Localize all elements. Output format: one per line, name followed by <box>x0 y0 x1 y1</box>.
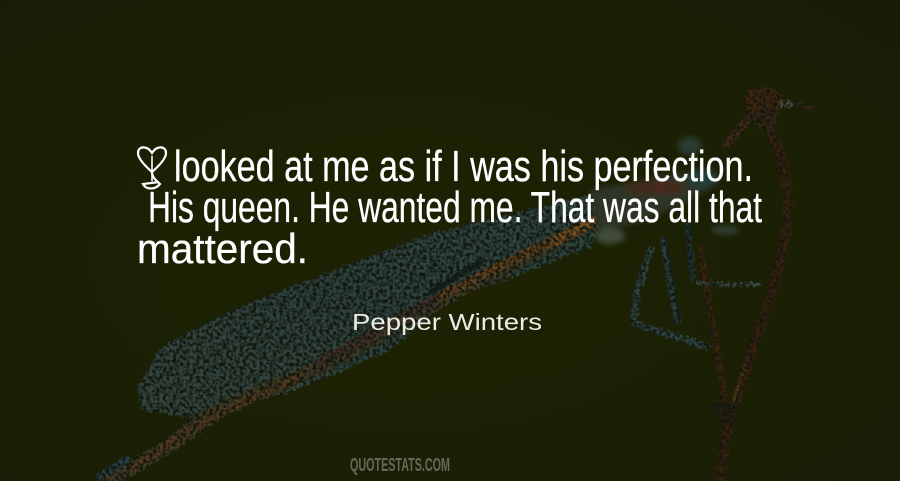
photo: dragonfly on a twig <box>100 87 813 481</box>
heart-shaped letter I <box>138 147 166 189</box>
words of line 1: looked at me as if I was his perfection. <box>174 142 753 191</box>
twig bud <box>742 87 794 130</box>
heart-shaped letter I: I <box>150 148 154 189</box>
wing <box>137 192 610 417</box>
watermark: QUOTESTATS.COM <box>350 455 450 475</box>
twig <box>700 103 813 481</box>
abdomen <box>100 218 600 481</box>
quote text <box>137 142 762 272</box>
thorax and head <box>590 137 739 244</box>
quote line 1 <box>138 142 753 191</box>
author name: Pepper Winters <box>352 309 542 335</box>
legs <box>633 225 757 347</box>
quote line 3: mattered. <box>137 225 308 272</box>
